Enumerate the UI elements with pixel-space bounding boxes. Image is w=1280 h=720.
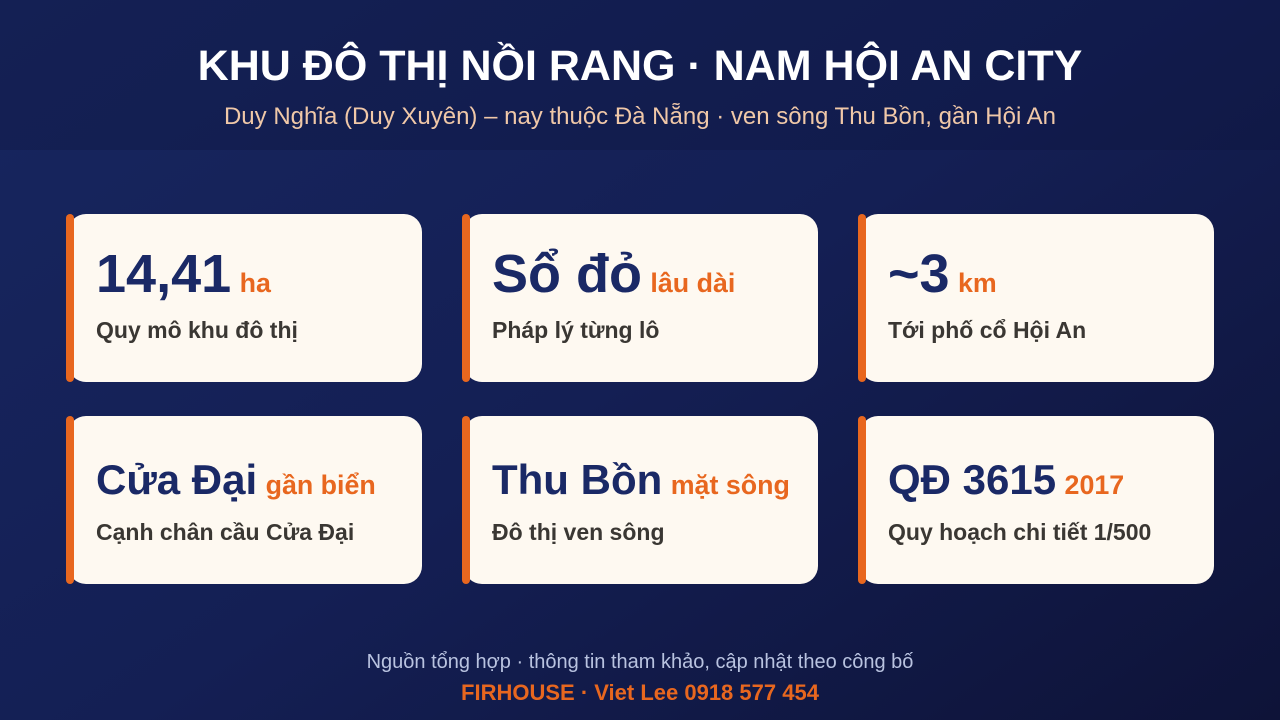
panel: planning card: [858, 416, 1214, 584]
source note: Nguồn tổng hợp · thông tin tham khảo, cập nhật theo công bố: [367, 651, 913, 673]
label: river: Đô thị ven sông: [492, 519, 664, 545]
contact line: FIRHOUSE · Viet Lee 0918 577 454: [461, 680, 819, 705]
title: KHU ĐÔ THỊ NỒI RANG · NAM HỘI AN CITY: [198, 42, 1082, 90]
subtitle: Duy Nghĩa (Duy Xuyên) – nay thuộc Đà Nẵng · ven sông Thu Bồn, gần Hội An: [224, 103, 1056, 130]
label: area: Quy mô khu đô thị: [96, 317, 298, 343]
header band: [0, 0, 1280, 150]
panel: river card: [462, 416, 818, 584]
stat: river: Thu Bồn mặt sông: [492, 456, 790, 503]
label: planning decision: Quy hoạch chi tiết 1/500: [888, 519, 1151, 545]
stat: distance: ~3 km: [888, 244, 997, 304]
label: distance: Tới phố cổ Hội An: [888, 317, 1086, 343]
panel: distance card: [858, 214, 1214, 382]
panel: legal card: [462, 214, 818, 382]
panel: scale card: [66, 214, 422, 382]
label: legal title: Pháp lý từng lô: [492, 317, 659, 343]
stat: planning decision: QĐ 3615 2017: [888, 456, 1124, 503]
stat: beach: Cửa Đại gần biển: [96, 456, 376, 503]
stat: legal title: Sổ đỏ lâu dài: [492, 244, 735, 304]
panel: beach card: [66, 416, 422, 584]
stat: area: 14,41 ha: [96, 244, 271, 304]
label: beach: Cạnh chân cầu Cửa Đại: [96, 519, 354, 545]
